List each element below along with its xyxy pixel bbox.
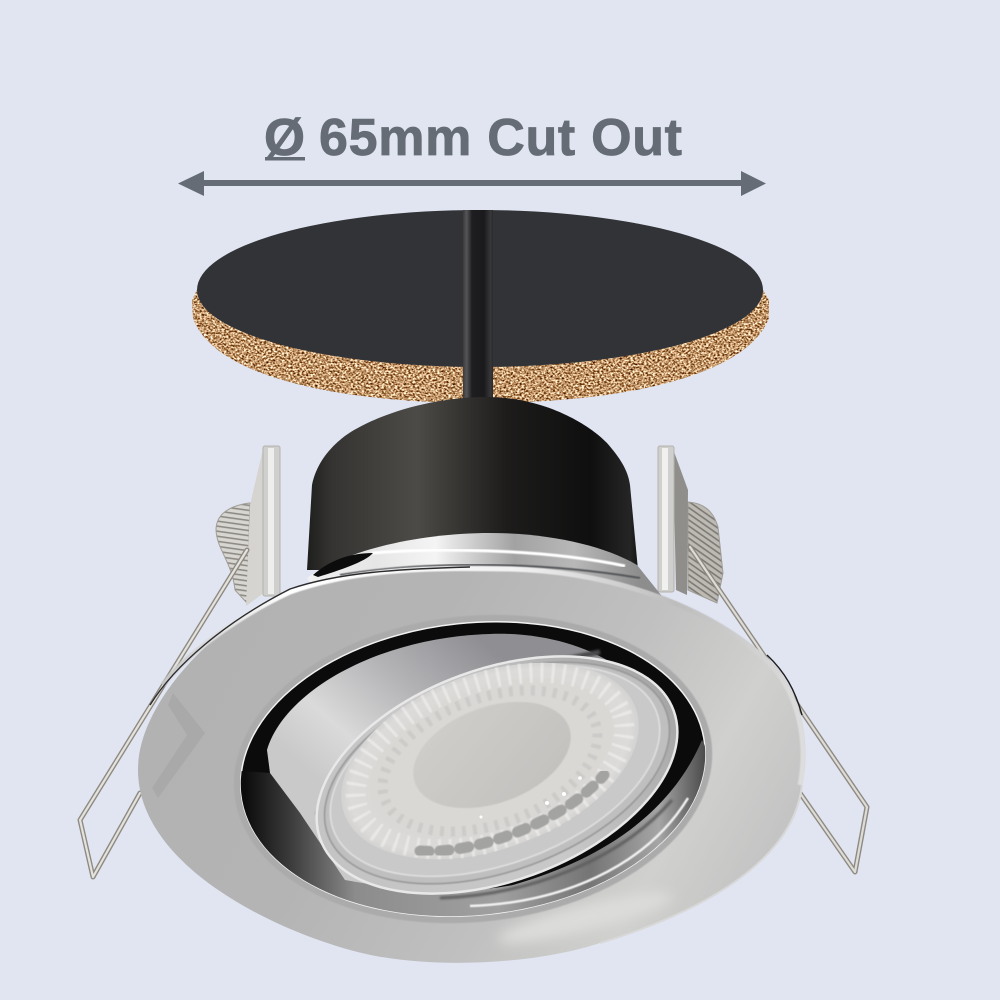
- black housing: [307, 397, 638, 570]
- left bracket: [263, 446, 280, 596]
- silver gimbal body: [267, 634, 625, 893]
- chrome collar: [307, 533, 665, 600]
- chrome trim flange: [138, 567, 805, 963]
- inner lens band: [350, 648, 634, 866]
- flange soft highlight: [500, 894, 666, 945]
- body highlight: [318, 652, 600, 815]
- title: 65mm cut out: 65mm Cut Out: [319, 109, 682, 167]
- left wire clip: [80, 446, 280, 877]
- lens sparkles: [480, 776, 582, 818]
- left spring coil: [216, 503, 250, 603]
- bezel inner highlight: [302, 625, 688, 917]
- collar dark reflection: [313, 553, 373, 577]
- opening outer rim: [218, 592, 728, 946]
- bezel inner ring: [294, 619, 700, 927]
- light opening: [234, 615, 712, 924]
- title: 65mm cut out: Ø: [264, 109, 305, 167]
- cut-out hole: [197, 210, 763, 367]
- arrow: cut-out width dimension: [178, 171, 766, 196]
- lens module: [284, 611, 710, 939]
- flange rim highlights: [150, 567, 803, 943]
- lens bezel: [284, 611, 710, 939]
- right spring wire: [690, 547, 867, 872]
- right bracket: [658, 446, 674, 592]
- reflector ridges: [331, 639, 649, 883]
- lower inner metal: [240, 740, 706, 916]
- ceiling board with cut-out: [192, 210, 769, 403]
- left bracket wedge: [246, 449, 265, 606]
- right wire clip: [658, 446, 867, 872]
- right bracket wedge: [673, 449, 688, 595]
- opening black ring: [226, 599, 720, 939]
- reflector facets: [363, 663, 617, 859]
- central lens: [399, 682, 585, 828]
- board edge: chipboard texture: [192, 290, 769, 403]
- right spring coil: [688, 502, 723, 603]
- left spring wire: [80, 550, 247, 877]
- reflector: [314, 625, 666, 897]
- black rod: [463, 210, 493, 402]
- LED cups: [420, 775, 604, 851]
- flange chevron mark: [152, 693, 205, 798]
